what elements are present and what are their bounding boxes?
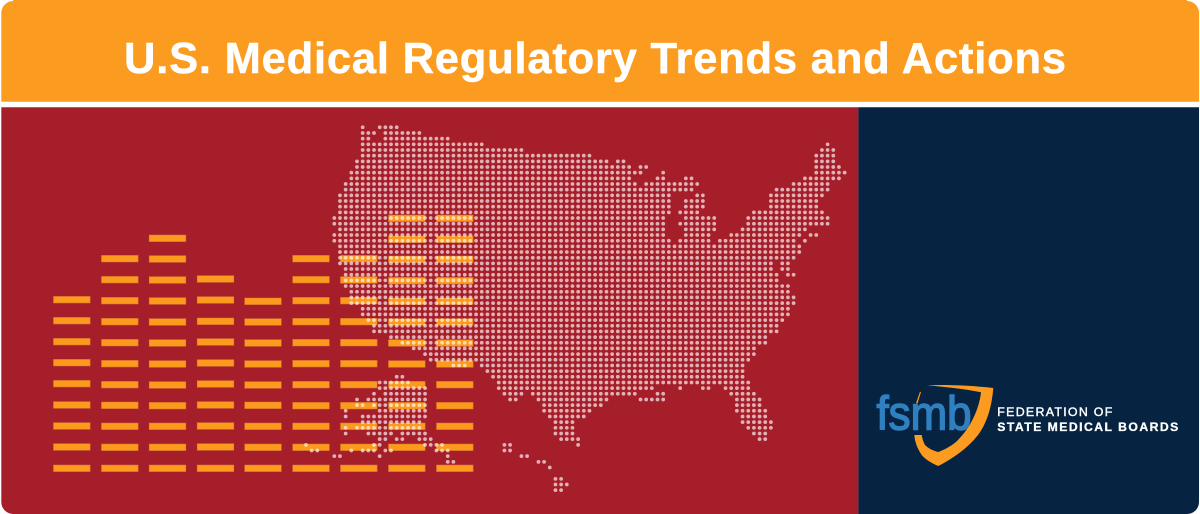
header band [1,0,1199,102]
bar column 4 [197,276,234,472]
contiguous states [334,127,845,445]
logo letters: fsmb [876,386,972,440]
Alaska [306,377,453,462]
bar column 2 [102,255,138,472]
bar column 8 [388,215,425,472]
bar column 1 [54,296,90,472]
bar column 9 [436,215,473,472]
bar column 5 [245,298,281,472]
logo wordmark line 2: STATE MEDICAL BOARDS [997,420,1178,434]
Hawaii [504,445,567,490]
dotted map of the United States [306,127,845,490]
logo wordmark line 1: FEDERATION OF [997,405,1113,419]
logo: FSMB [876,385,1178,466]
panel: navy logo background [858,107,1199,514]
title: U.S. Medical Regulatory Trends and Actions [124,35,1066,83]
bar column 3 [149,235,186,472]
panel: red map and chart background [1,107,858,514]
bar chart: stacked orange segments [54,215,473,472]
bar column 6 [293,255,329,472]
icon: orange shield [914,385,993,466]
bar column 7 [340,255,377,472]
